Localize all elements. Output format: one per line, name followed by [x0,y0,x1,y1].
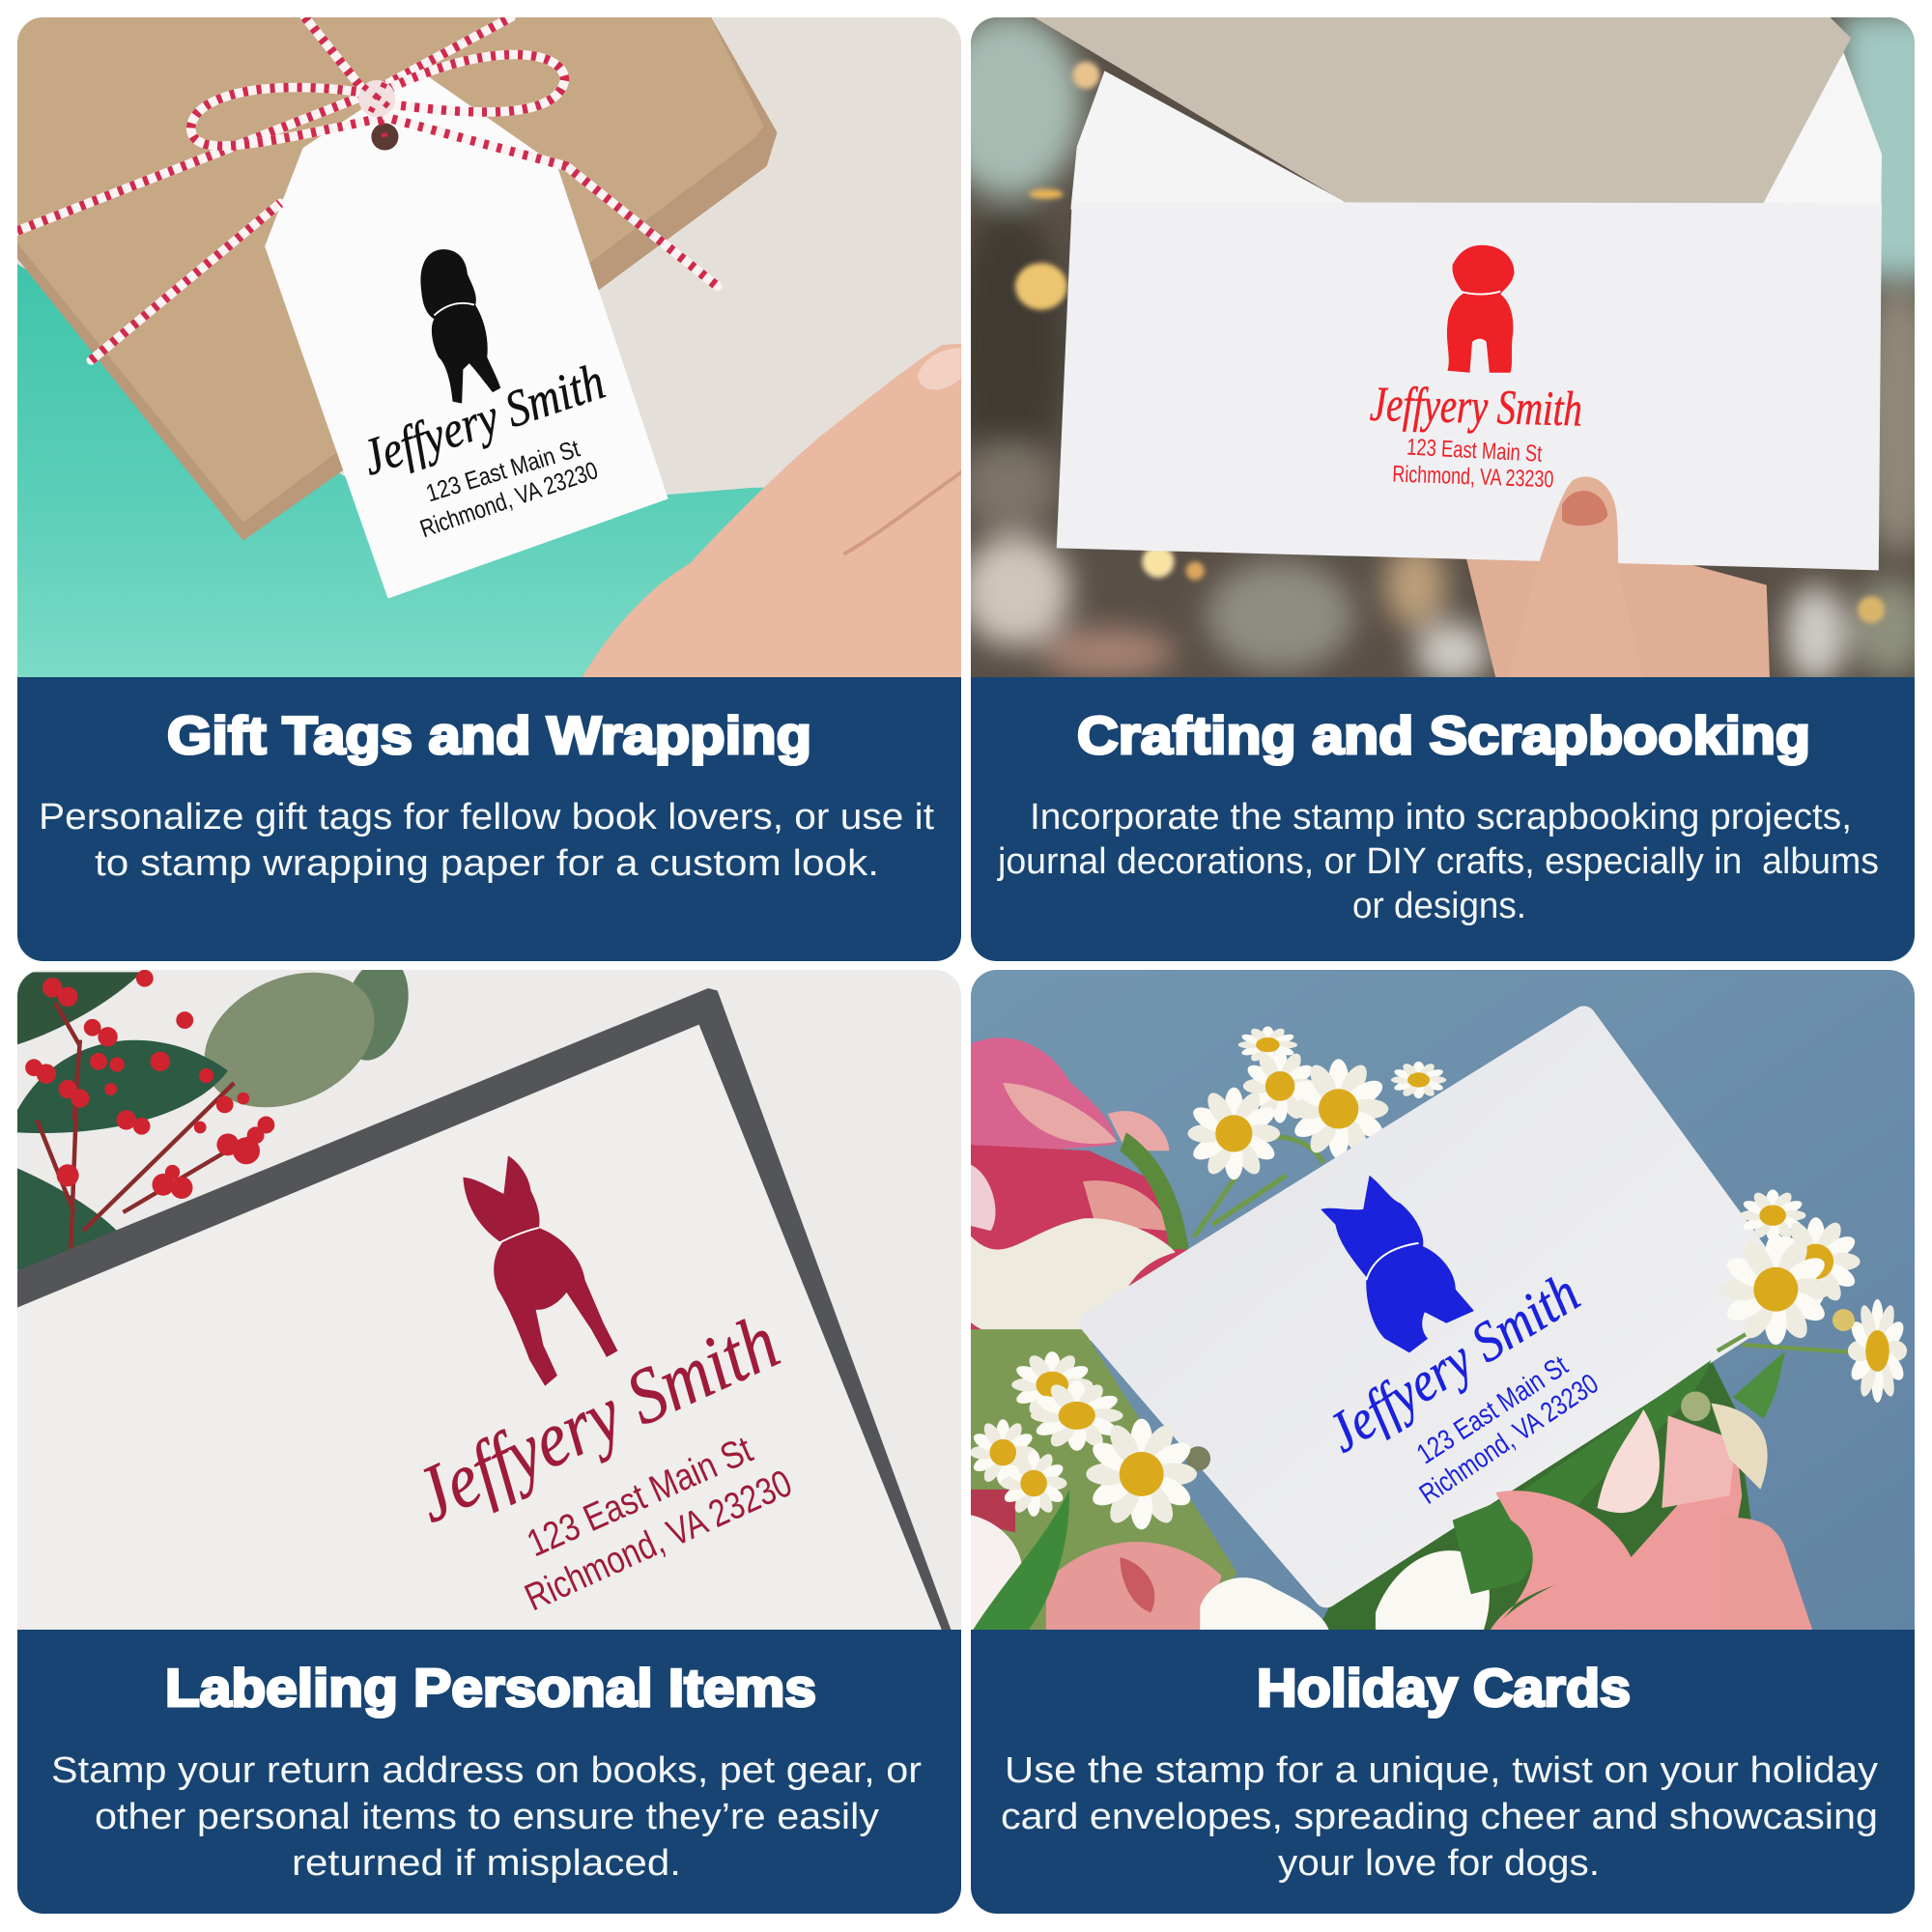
panel: labeling personal items [0,947,985,1914]
bouquet in front of card [1200,1329,1878,1631]
stamp: name and address: 123 East Main St [1411,1350,1574,1470]
stamp: name and address: Richmond, VA 23230 [1414,1368,1605,1511]
stamp: name and address: Jeffyery Smith [1369,378,1583,438]
hand [582,342,985,677]
body text: to stamp wrapping paper for a custom look. [95,843,879,884]
caption bar [971,677,1915,961]
body text: Personalize gift tags for fellow book lovers, or use it [39,797,934,838]
body text [1001,1750,1878,1884]
stamp: name and address: Richmond, VA 23230 [1392,462,1554,493]
stamp: name and address [368,365,607,537]
stamp: black dog silhouette [420,249,500,404]
stamp: name and address: Jeffyery Smith [402,1297,791,1539]
stamp: name and address: 123 East Main St [423,435,582,507]
stamp: name and address: Jeffyery Smith [355,352,611,487]
notebook page [13,1025,942,1631]
panel: crafting and scrapbooking [935,0,1932,961]
kraft gift box [13,13,778,541]
twine bow [17,17,718,360]
body text [997,797,1879,926]
envelope front [1057,202,1882,570]
white card [1093,1018,1788,1596]
caption bar [17,1630,961,1914]
caption bar [971,1630,1915,1914]
thumb [1540,476,1619,563]
stamp: name and address: Richmond, VA 23230 [416,457,602,543]
photo: card in flower bouquet [966,966,1932,1631]
stamp: name and address: 123 East Main St [1406,435,1543,468]
bouquet behind card [966,1037,1767,1631]
stamp: name and address: Jeffyery Smith [1317,1261,1590,1464]
bokeh lights [1015,62,1885,623]
body text [39,797,934,884]
body text: Use the stamp for a unique, twist on your holiday [1005,1750,1878,1791]
stamp: name and address [1370,386,1580,488]
heading: Holiday Cards [1257,1658,1631,1718]
photo: notebook with plant [0,947,985,1631]
stamp: name and address: Richmond, VA 23230 [519,1462,798,1619]
gift tag [265,71,668,599]
photo: gift box with tag [0,0,985,677]
body text: or designs. [1352,886,1526,926]
body text: your love for dogs. [1278,1843,1600,1884]
hand behind envelope [1466,557,1770,677]
blurred festive background [935,13,1932,684]
body text: Incorporate the stamp into scrapbooking projects, [1030,797,1852,838]
heading: Labeling Personal Items [165,1658,816,1718]
heading: Crafting and Scrapbooking [1077,705,1810,765]
panel: holiday cards [966,966,1932,1914]
stamp: maroon dog silhouette [463,1155,617,1386]
body text: Stamp your return address on books, pet gear, or [51,1750,922,1791]
body text [51,1750,922,1884]
kraft card insert [1026,13,1851,207]
body text: returned if misplaced. [292,1843,681,1884]
daisies over card [1031,1189,1907,1529]
eucalyptus and dark leaves [13,947,419,1271]
daisies behind card [970,1026,1446,1517]
heading: Gift Tags and Wrapping [167,705,811,765]
stamp: name and address [402,1297,798,1619]
envelope flaps [1070,71,1348,210]
body text: card envelopes, spreading cheer and showcasing [1001,1797,1878,1837]
photo: envelope held in hand [935,0,1932,684]
panel: gift tags and wrapping [0,0,985,961]
stamp: red dog silhouette [1447,245,1514,373]
stamp: blue dog silhouette [1321,1176,1474,1352]
body text: other personal items to ensure they’re easily [95,1797,879,1837]
stamp: name and address: 123 East Main St [521,1428,758,1565]
notebook grey cover [13,988,952,1631]
red berries on twigs [25,970,274,1249]
caption bar [17,677,961,961]
body text: journal decorations, or DIY crafts, especially in albums [997,841,1879,882]
